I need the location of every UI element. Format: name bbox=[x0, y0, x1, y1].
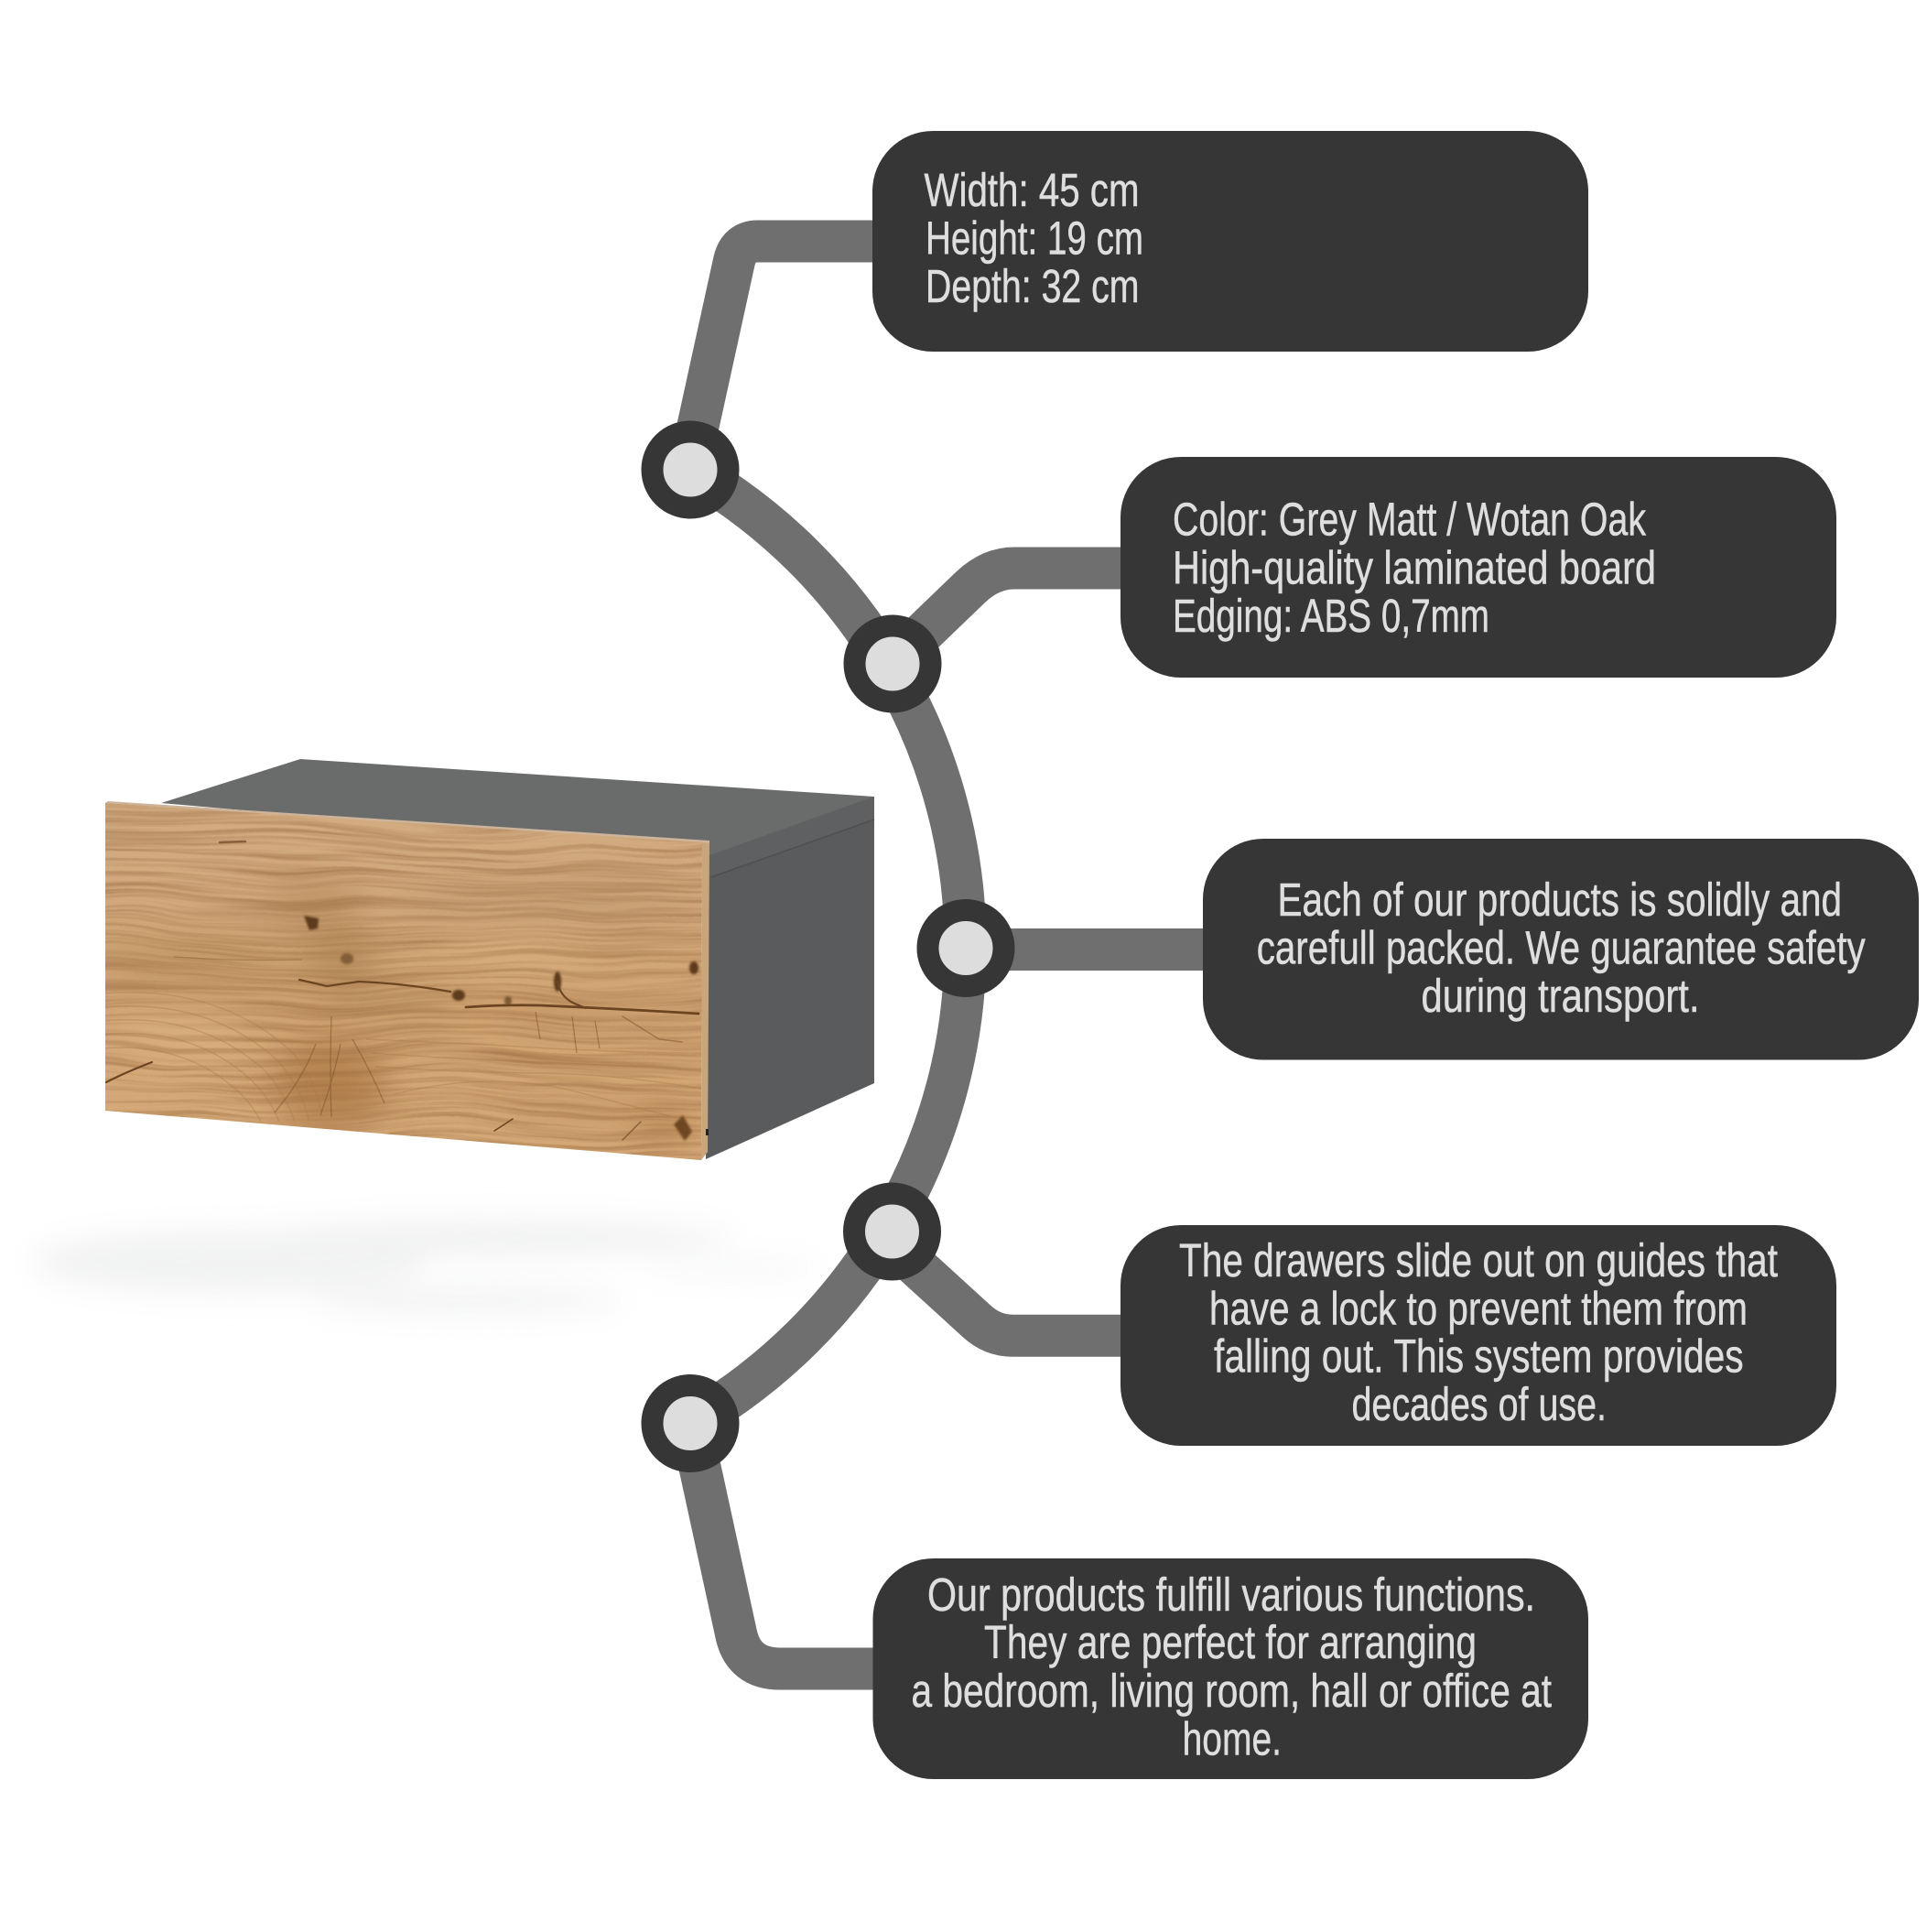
dimensions text: Depth: 32 cm bbox=[926, 260, 1139, 312]
node 3 bbox=[928, 910, 1003, 986]
material text: High-quality laminated board bbox=[1173, 542, 1656, 593]
panel: dimensions bbox=[872, 131, 1588, 352]
connector to functions panel bbox=[690, 1423, 888, 1668]
material text: Color: Grey Matt / Wotan Oak bbox=[1173, 493, 1646, 546]
packaging text bbox=[1257, 874, 1866, 1022]
wood growth rings bbox=[103, 993, 705, 1122]
drawer guides text bbox=[1179, 1234, 1778, 1430]
dimensions text: Height: 19 cm bbox=[926, 212, 1143, 264]
node 2 bbox=[855, 626, 930, 701]
cabinet top face bbox=[161, 759, 874, 877]
floor shadow under cabinet bbox=[32, 1220, 824, 1313]
dimensions text: Width: 45 cm bbox=[925, 164, 1139, 216]
functions text: Our products fulfill various functions. bbox=[927, 1568, 1535, 1621]
drawer edge banding bbox=[701, 841, 709, 1160]
connector to material panel bbox=[888, 568, 1135, 667]
packaging text: during transport. bbox=[1421, 970, 1699, 1022]
material text: Edging: ABS 0,7mm bbox=[1173, 590, 1489, 642]
product image: drawer cabinet bbox=[92, 759, 874, 1172]
connector lines bbox=[688, 242, 1218, 1668]
drawer guides text: decades of use. bbox=[1351, 1378, 1607, 1430]
node 1 bbox=[652, 432, 729, 507]
connector to drawer guides panel bbox=[883, 1236, 1135, 1336]
functions text: They are perfect for arranging bbox=[984, 1616, 1477, 1668]
dimensions text bbox=[925, 164, 1143, 312]
panel: drawer guides bbox=[1120, 1225, 1836, 1446]
cabinet side face bbox=[706, 797, 874, 1159]
panel: functions bbox=[873, 1558, 1588, 1779]
drawer guides text: falling out. This system provides bbox=[1214, 1330, 1744, 1383]
material text bbox=[1173, 493, 1656, 642]
connector to packaging panel bbox=[966, 928, 1218, 971]
drawer guides text: The drawers slide out on guides that bbox=[1179, 1234, 1778, 1286]
functions text: home. bbox=[1183, 1713, 1282, 1765]
panel: material bbox=[1120, 457, 1836, 678]
panel: packaging bbox=[1203, 839, 1919, 1060]
node 5 bbox=[652, 1385, 729, 1461]
node 4 bbox=[854, 1194, 930, 1269]
wood cracks bbox=[106, 841, 698, 1140]
wooden drawer front bbox=[105, 803, 702, 1160]
node circles bbox=[652, 432, 1003, 1461]
functions text bbox=[912, 1568, 1552, 1765]
functions text: a bedroom, living room, hall or office at bbox=[912, 1665, 1552, 1717]
central arc connector bbox=[690, 470, 966, 1423]
drawer guides text: have a lock to prevent them from bbox=[1209, 1283, 1748, 1335]
connector to dimensions panel bbox=[688, 242, 888, 470]
